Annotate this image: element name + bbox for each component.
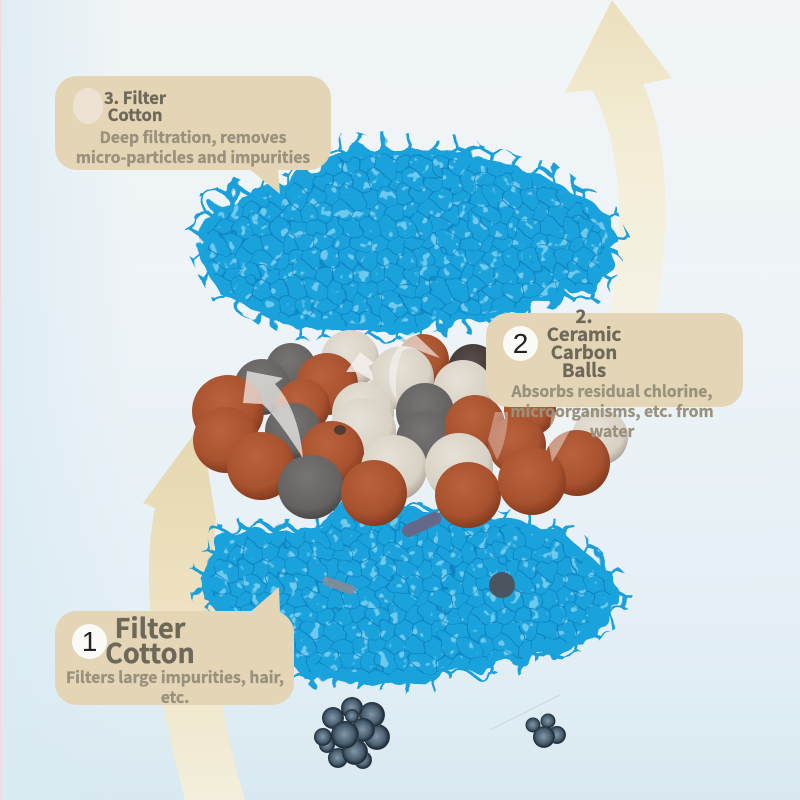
small dark spot on ball [334,425,346,435]
heading: 3. Filter Cotton [104,85,166,126]
microbe cluster: small [526,714,566,748]
pink edge line [0,0,1,800]
arrow: right upward flow [565,0,672,320]
filter layer: lower blue cotton [187,497,630,694]
heading: Filter Cotton [105,607,195,671]
text: step 3 description [76,125,310,168]
translucent flow arrows over the balls [243,332,580,462]
microbe: dark ball on lower filter [489,572,515,598]
heading: Filter Cotton: Filter [115,607,185,646]
panel: step 3 filter cotton [55,76,331,170]
heading: 2. Ceramic Carbon Balls [547,303,621,383]
heading: 2. Ceramic Carbon Balls: Carbon [551,339,617,365]
text: step 2 description: microorganisms, etc. from [510,399,714,422]
hair strand [490,695,560,730]
icon: number circle 2 [503,326,538,361]
icon: number circle 1: 1 [82,626,97,657]
panel: step 1 filter cotton [55,611,294,705]
text: step 3 description: Deep filtration, removes [100,125,286,148]
ceramic carbon balls [192,330,628,528]
microbe cluster: large [314,697,390,769]
icon: faded number circle 3 [73,88,103,124]
text: step 1 description: Filters large impurities, hair, [66,665,284,688]
filter layer: upper blue cotton [185,132,630,343]
arrow: left upward flow [143,430,245,800]
text: step 2 description: Absorbs residual chlorine, [512,379,712,402]
heading: 2. Ceramic Carbon Balls: Ceramic [547,321,621,347]
text: step 1 description [66,665,284,708]
heading: 3. Filter Cotton: 3. Filter [104,85,166,109]
particle: fibre on lower filter [321,575,356,596]
panel: step 2 ceramic carbon balls [486,313,743,407]
text: step 2 description: water [590,419,634,442]
heading: Filter Cotton: Cotton [105,632,195,671]
text: step 3 description: micro-particles and impurities [76,145,310,168]
heading: 2. Ceramic Carbon Balls: 2. [576,303,592,329]
heading: 2. Ceramic Carbon Balls: Balls [562,357,606,383]
particle: rod on lower filter [400,510,444,539]
text: step 1 description: etc. [161,685,189,708]
heading: 3. Filter Cotton: Cotton [108,102,162,126]
icon: number circle 2: 2 [513,328,528,359]
text: step 2 description [510,379,714,442]
icon: number circle 1 [72,624,107,659]
